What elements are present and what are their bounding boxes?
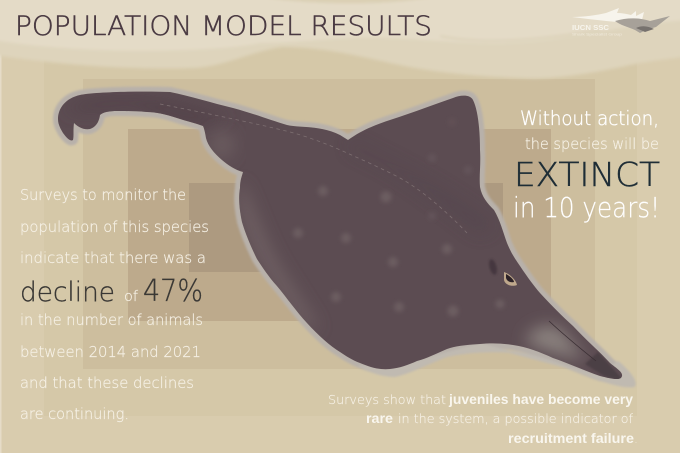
saw line bbox=[549, 321, 596, 361]
back stitching bbox=[160, 104, 467, 233]
logo: IUCN SSC Shark Specialist Group: Shark Specialist Group bbox=[572, 32, 622, 36]
extinction callout: in 10 years! bbox=[513, 191, 660, 224]
logo: IUCN SSC Shark Specialist Group: IUCN SSC bbox=[572, 23, 610, 32]
left text block: Surveys to monitor the bbox=[20, 186, 186, 204]
body shading bbox=[102, 111, 622, 379]
left text block: between 2014 and 2021 bbox=[20, 343, 201, 361]
left text block bbox=[20, 186, 209, 423]
recruitment note: rare bbox=[366, 410, 393, 426]
extinction callout: Without action, bbox=[520, 107, 659, 130]
left text block: indicate that there was a bbox=[20, 249, 206, 267]
left text block: in the number of animals bbox=[20, 311, 203, 329]
extinction callout bbox=[513, 107, 660, 224]
decline stat: 47% bbox=[143, 274, 203, 309]
extinction callout: EXTINCT bbox=[514, 155, 660, 194]
recruitment note: in the system, a possible indicator of bbox=[398, 411, 634, 426]
eye bbox=[504, 272, 517, 286]
body bbox=[58, 92, 622, 379]
spots bbox=[294, 186, 504, 316]
decline stat: of bbox=[124, 289, 138, 305]
halo outline bbox=[58, 92, 635, 386]
title: POPULATION MODEL RESULTS bbox=[15, 11, 432, 42]
left text block: population of this species bbox=[20, 218, 209, 236]
left text block: and that these declines bbox=[20, 374, 194, 392]
top waves bbox=[0, 0, 680, 78]
spiracle bbox=[488, 258, 498, 276]
logo: IUCN SSC Shark Specialist Group bbox=[572, 8, 670, 36]
recruitment note: . bbox=[634, 431, 638, 446]
recruitment note: Surveys show that bbox=[328, 392, 446, 407]
left text block: are continuing. bbox=[20, 405, 129, 423]
extinction callout: the species will be bbox=[525, 135, 659, 153]
decline stat bbox=[20, 274, 203, 309]
sawfish illustration bbox=[58, 92, 635, 386]
recruitment note: recruitment failure bbox=[508, 430, 634, 446]
recruitment note: juveniles have become very bbox=[448, 391, 633, 407]
decline stat: decline bbox=[20, 277, 115, 308]
recruitment note bbox=[328, 391, 638, 446]
